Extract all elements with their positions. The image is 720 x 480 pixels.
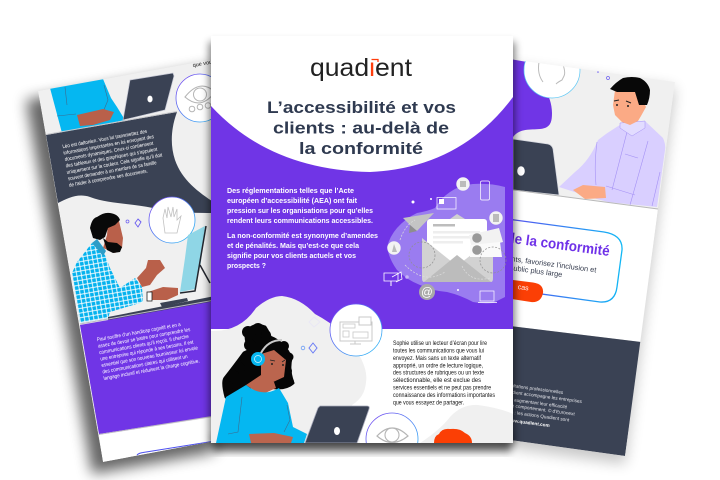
illustration: envelope and channels (384, 177, 506, 303)
dashed arcs (409, 242, 435, 268)
text: Paul paragraph: Paul souffre d'un handicap cognitif et en a (97, 322, 181, 343)
illustration: sparkle marks (301, 317, 320, 353)
illustration: woman with headset (216, 323, 307, 443)
text: Paul paragraph: assez de devoir se battre pour comprendre les (98, 327, 191, 350)
intro text (227, 186, 378, 270)
paper plane (403, 213, 434, 233)
callout body (513, 257, 596, 278)
text: Sophie paragraph (393, 340, 496, 406)
intro text: La non-conformité est synonyme d’amendes (227, 231, 378, 240)
panel: dark footer: en augmentant leur efficacité (507, 397, 568, 410)
title: L’accessibilité et vos (267, 98, 456, 117)
panel: dark footer (513, 326, 640, 456)
text: Paul paragraph: essentiel que son nouveau fournisseur lui envoie (101, 345, 199, 369)
panel: dark footer: de comportement. © d'Euronext (509, 402, 576, 417)
text: Léo paragraph: uniquement sur la couleur. Cela signifie qu'il doit (66, 152, 163, 176)
text: Léo paragraph (62, 129, 163, 189)
panel: dark footer: les consultations professionnelles (494, 381, 564, 395)
logo: quadient (310, 54, 412, 82)
illustration: envelope and channels: @ (421, 287, 433, 299)
callout body: Respectez les exigences de vos clients, favorisez l'inclusion et (393, 239, 597, 274)
grey lower background (211, 296, 366, 443)
text: Léo paragraph: souvent demander à un membre de sa famille (68, 160, 157, 182)
text: Paul paragraph: une entreprise qui réponde à ses besoins. Il est (100, 340, 194, 363)
arms (137, 260, 165, 287)
text: Sophie paragraph: toutes les communications que vous lui (393, 348, 484, 354)
callout: beyond compliance (513, 219, 623, 303)
shadows under the pages (26, 66, 675, 474)
face, beard and hair (103, 221, 123, 253)
intro text: pression sur les organisations pour qu’elles (227, 206, 373, 215)
panel: left back page (38, 59, 224, 462)
text: top clipped line: que vous (192, 59, 216, 69)
intro text: européen d’accessibilité (AEA) ont fait (227, 196, 358, 205)
icon: raised hand circle (149, 197, 195, 243)
purple blob (513, 60, 552, 137)
title: clients : au-delà de (273, 118, 449, 138)
button (513, 280, 544, 302)
illustration: laptop (123, 73, 174, 120)
text: Paul paragraph: des communications claires qui utilisent un (102, 354, 188, 375)
intro text: Des réglementations telles que l’Acte (227, 186, 354, 195)
text: Paul paragraph (97, 322, 200, 382)
button: cas (517, 284, 529, 292)
panel: purple text block (80, 300, 215, 434)
curls (223, 323, 294, 391)
panel: front page (211, 36, 513, 465)
panel: dark text block (46, 112, 215, 213)
panel: right back page (513, 60, 674, 456)
text: Sophie paragraph: des structures de rubriques ou un texte (393, 370, 484, 377)
illustration: woman's sweater and hand continued (50, 79, 125, 133)
intro text: et de pénalités. Mais qu’est-ce que cela (227, 241, 360, 250)
intro text: prospects ? (227, 261, 266, 270)
text: Sophie paragraph: sélectionnable, elle est exclue des (393, 377, 482, 384)
text: Paul paragraph: langage inclusif et réduisent la charge cognitive. (103, 358, 200, 382)
callout body: touchez un public plus large (471, 258, 563, 279)
text: Sophie paragraph: connaissance des informations importantes (393, 392, 496, 399)
intro text: signifie pour vos clients actuels et vos (227, 251, 356, 260)
text: Léo paragraph: documents dynamiques. Ceux-ci contiennent (64, 141, 154, 163)
orange blob (434, 429, 472, 443)
text: Sophie paragraph: envoyez. Mais sans un texte alternatif (393, 355, 481, 362)
panel: dark footer: © : les actions Quadient sont (509, 409, 570, 423)
icon: monitor circle (330, 304, 382, 356)
front page shadow (209, 42, 515, 452)
illustration: man at monitor (72, 213, 215, 324)
illustration: laptop (513, 139, 559, 195)
text: Léo paragraph: informations importantes en lui envoyant des (63, 134, 155, 157)
text: Sophie paragraph: Sophie utilise un lecteur d’écran pour lire (393, 340, 487, 347)
text: Léo paragraph: des tableaux et des graphiques qui s'appuient (65, 147, 158, 169)
icon: eye circle (366, 413, 418, 465)
panel: dark footer: www.quadient.com (506, 417, 550, 428)
white page footer with callout edge (99, 417, 215, 462)
text: Paul paragraph: communications clients qu'il reçoit. Il cherche (99, 334, 189, 356)
purple section with curved top (211, 97, 513, 329)
channel icons (456, 177, 470, 191)
text: Sophie paragraph: que vous essayez de partager. (393, 399, 464, 406)
text: Léo paragraph: de l'aider à comprendre ses documents. (69, 169, 148, 189)
icon: head circle (524, 61, 580, 98)
title: la conformité (299, 139, 423, 158)
envelope (422, 214, 493, 282)
callout heading: Au-delà de la conformité (453, 223, 611, 260)
icon: eye circle (176, 74, 211, 122)
text: Sophie paragraph: approprié, un ordre de lecture logique, (393, 362, 483, 369)
intro text: rendent leurs communications accessibles. (227, 216, 373, 225)
title (268, 101, 456, 154)
illustration: laptop (305, 406, 369, 443)
cards (469, 228, 503, 257)
illustration: man with shirt (510, 71, 665, 209)
shirt (72, 243, 143, 323)
text: Léo paragraph: Léo est daltonien. Vous lui transmettez des (62, 129, 148, 150)
text: Sophie paragraph: services essentiels et ne peut pas prendre (393, 384, 491, 392)
panel: dark footer: Quadient accompagne les entreprises (503, 389, 583, 404)
